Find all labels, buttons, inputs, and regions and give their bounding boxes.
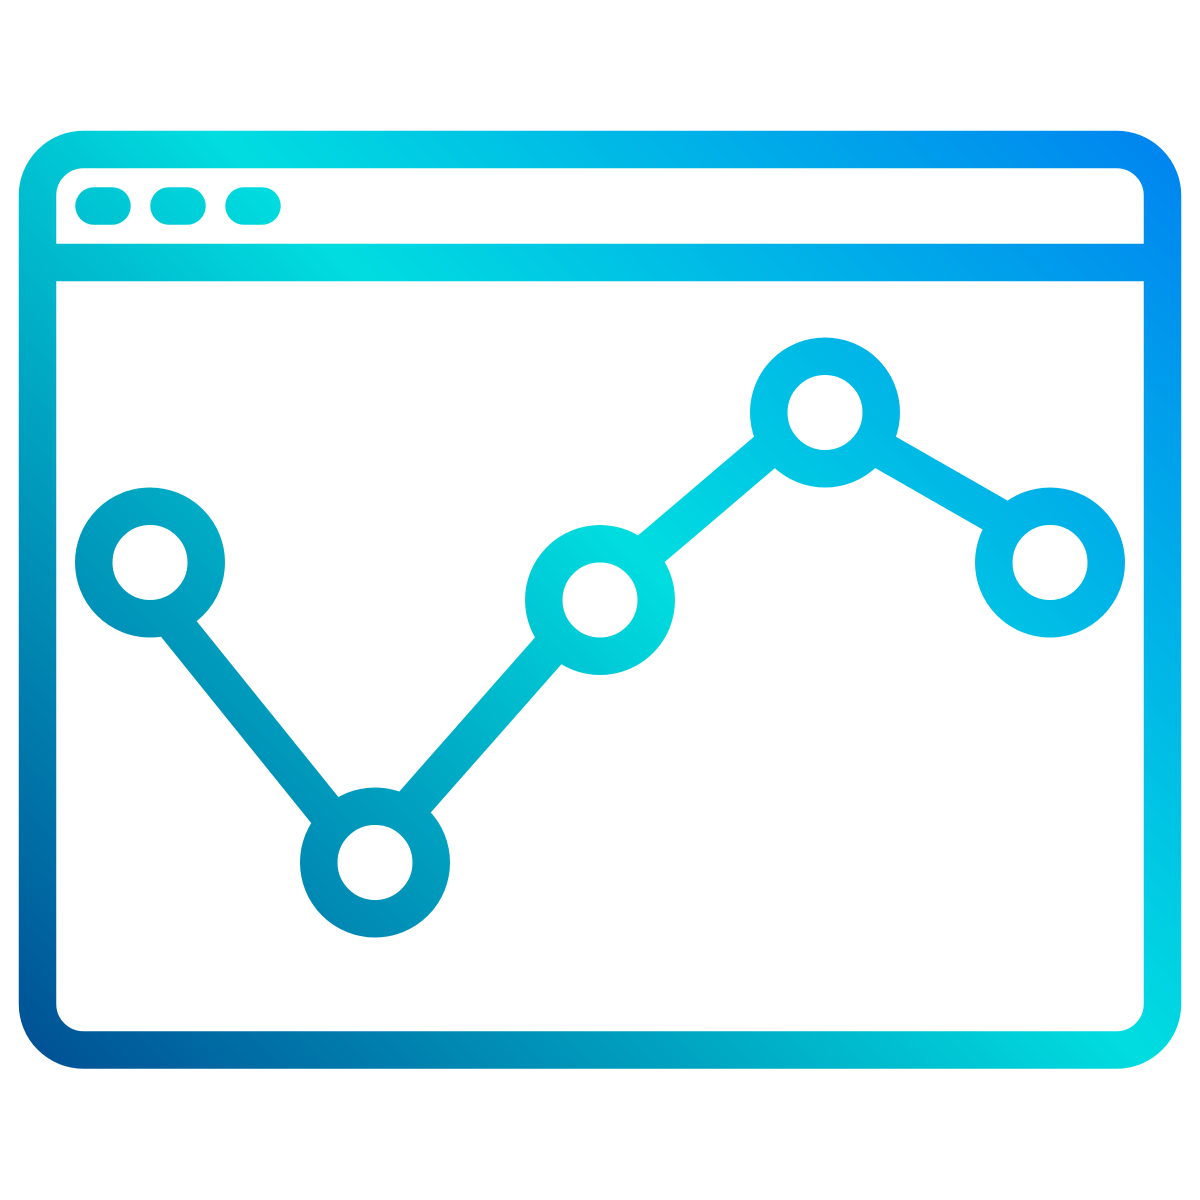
title bar divider: [38, 244, 1162, 281]
chart connecting lines: [170, 446, 1002, 819]
window frame: [38, 150, 1162, 1050]
chart data points: [94, 356, 1106, 919]
window control buttons: [94, 187, 262, 225]
line chart: [94, 356, 1106, 919]
